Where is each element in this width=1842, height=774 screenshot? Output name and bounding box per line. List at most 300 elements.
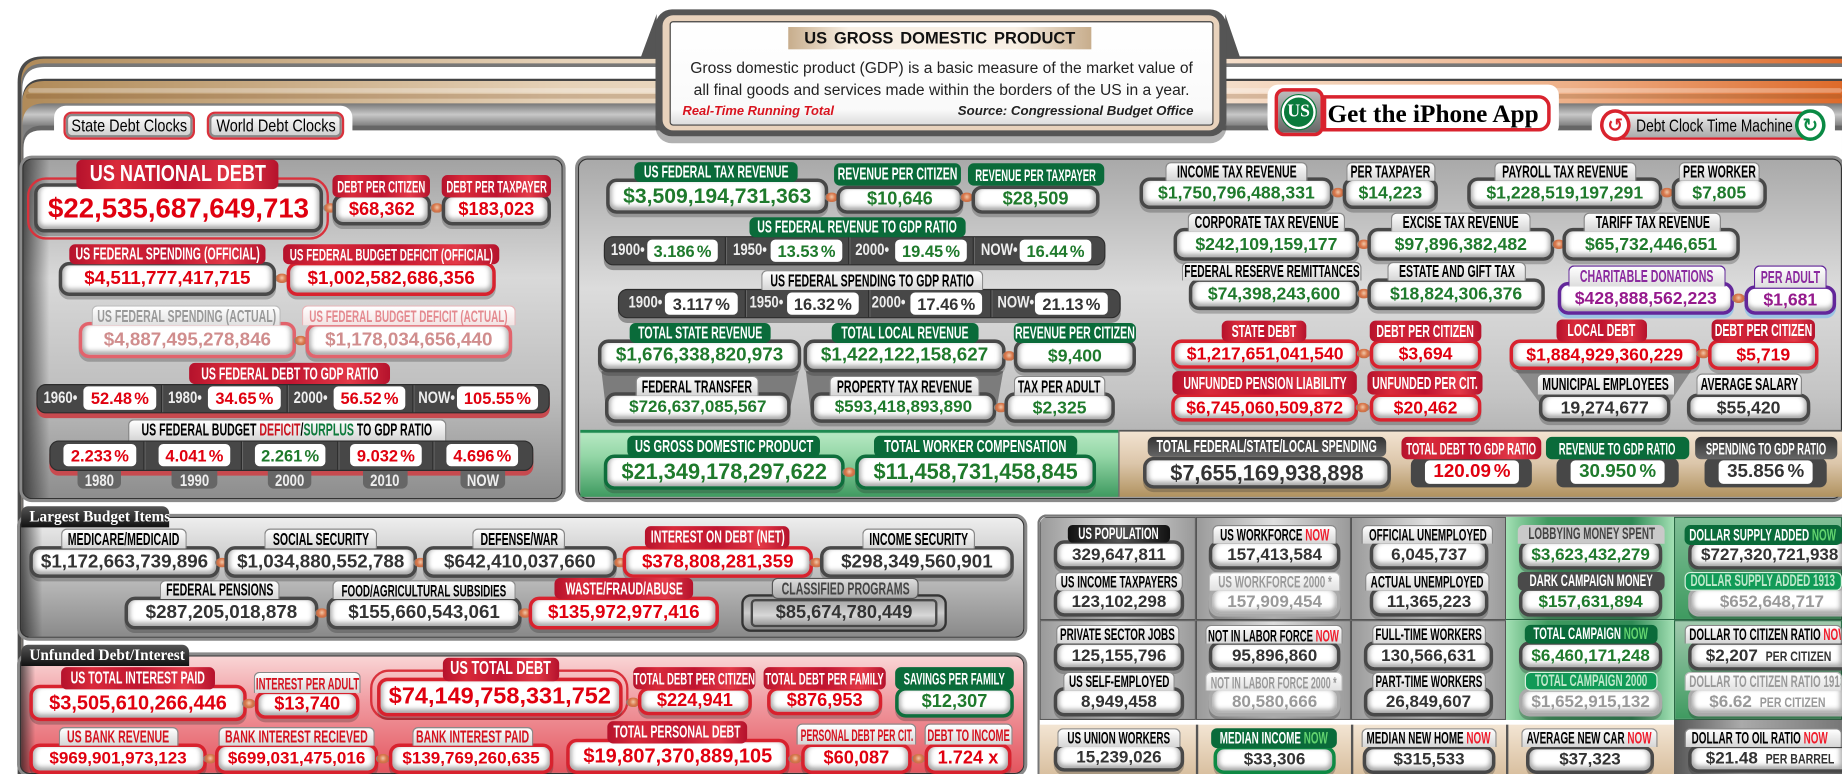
metric: US national debt: $22,535,687,649,713 bbox=[48, 192, 309, 223]
metric: US total interest paid bbox=[29, 667, 247, 721]
icon: back arrow bbox=[1600, 109, 1631, 141]
metric: tax per adult: TAX PER ADULT bbox=[1018, 376, 1101, 396]
metric: US total debt: US TOTAL DEBT bbox=[451, 659, 551, 679]
metric: social security: SOCIAL SECURITY bbox=[273, 529, 369, 548]
grid cell backgrounds bbox=[1040, 517, 1842, 774]
chart: federal spending to GDP ratio: 21.13 % bbox=[1042, 294, 1100, 313]
metric: social security bbox=[224, 529, 417, 578]
metric: local revenue per citizen bbox=[1014, 323, 1136, 376]
metric: US union workers bbox=[1054, 728, 1184, 772]
metric: federal budget deficit actual bbox=[302, 306, 516, 362]
metric: dollar supply added 1913: DOLLAR SUPPLY ADDED 1913 bbox=[1690, 572, 1835, 591]
tab: unfunded debt/interest: Unfunded Debt/Interest bbox=[29, 646, 185, 664]
chart: federal spending to GDP ratio: 3.117 % bbox=[673, 294, 730, 313]
metric: savings per family: SAVINGS PER FAMILY bbox=[904, 669, 1005, 688]
metric: US workforce 2000 bbox=[1209, 572, 1340, 617]
metric: lobbying money spent: $3,623,432,279 bbox=[1531, 546, 1650, 564]
metric: federal pensions: $287,205,018,878 bbox=[146, 603, 297, 622]
metric: municipal employees bbox=[1538, 374, 1674, 426]
chart: budget deficit/surplus to GDP ratio: 9.032 % bbox=[357, 446, 415, 465]
metric: federal transfer: FEDERAL TRANSFER bbox=[642, 376, 752, 396]
metric: unfunded per citizen: $20,462 bbox=[1394, 398, 1457, 418]
metric: US income taxpayers bbox=[1054, 572, 1184, 617]
metric: US gross domestic product: $21,349,178,297,622 bbox=[621, 459, 827, 484]
metric: payroll tax revenue bbox=[1467, 162, 1662, 213]
metric: total worker compensation bbox=[855, 436, 1096, 490]
metric: personal debt per citizen: $60,087 bbox=[823, 748, 889, 768]
metric: US gross domestic product bbox=[604, 436, 845, 490]
tab: largest budget items: Largest Budget Items bbox=[29, 507, 170, 525]
card description bbox=[690, 59, 1193, 99]
metric: charitable per adult: $1,681 bbox=[1763, 290, 1817, 310]
metric: defense/war bbox=[423, 529, 617, 578]
chart: federal debt to GDP ratio: 2000• bbox=[294, 388, 328, 406]
metric: part-time workers bbox=[1364, 672, 1493, 716]
icon: US badge: US bbox=[1287, 102, 1310, 121]
metric: total personal debt: $19,807,370,889,105 bbox=[583, 745, 772, 767]
chart: budget deficit/surplus to GDP ratio: 2000 bbox=[275, 470, 304, 489]
metric: federal transfer bbox=[605, 376, 791, 426]
metric: tax per adult: $2,325 bbox=[1033, 398, 1087, 418]
chart: federal spending to GDP ratio: 16.32 % bbox=[794, 294, 852, 313]
button: state debt clocks: State Debt Clocks bbox=[71, 116, 187, 136]
metric: unfunded pension liability: UNFUNDED PENSION LIABILITY bbox=[1183, 373, 1346, 393]
metric: waste/fraud/abuse: WASTE/FRAUD/ABUSE bbox=[565, 578, 683, 598]
chart: budget deficit/surplus to GDP ratio: US FEDERAL BUDGET DEFICIT/SURPLUS TO GDP RATIO bbox=[142, 420, 433, 440]
chart: budget deficit/surplus to GDP ratio: 2.233 % bbox=[71, 446, 129, 465]
metric: total campaign 2000 bbox=[1519, 672, 1663, 716]
metric: classified programs: $85,674,780,449 bbox=[776, 603, 912, 622]
metric: food/agricultural subsidies bbox=[327, 580, 522, 630]
metric: local debt: $1,884,929,360,229 bbox=[1526, 345, 1683, 365]
chart: federal revenue to GDP ratio: NOW• bbox=[981, 240, 1018, 258]
icon: US badge bbox=[1275, 88, 1324, 136]
metric: federal budget deficit official: $1,002,582,686,356 bbox=[308, 268, 475, 288]
metric: total debt per citizen bbox=[633, 667, 755, 715]
metric: US population bbox=[1054, 525, 1184, 570]
metric: estate and gift tax: $18,824,306,376 bbox=[1390, 284, 1522, 304]
chart: federal revenue to GDP ratio: 1950• bbox=[733, 240, 767, 258]
metric: defense/war: DEFENSE/WAR bbox=[480, 529, 557, 548]
metric: dollar supply added 1913 bbox=[1685, 572, 1842, 617]
metric: state debt per citizen: $3,694 bbox=[1399, 344, 1452, 364]
metric: income security bbox=[820, 529, 1014, 578]
metric: social security: $1,034,880,552,788 bbox=[237, 551, 404, 571]
chart: federal spending to GDP ratio: NOW• bbox=[997, 292, 1034, 311]
icon: back arrow: ↺ bbox=[1607, 114, 1623, 136]
button: get the iPhone app bbox=[1268, 85, 1559, 136]
metric: corporate tax revenue: $242,109,159,177 bbox=[1195, 234, 1337, 254]
metric: personal debt per citizen bbox=[796, 723, 916, 774]
metric: waste/fraud/abuse bbox=[529, 578, 719, 630]
metric: private sector jobs bbox=[1054, 625, 1184, 671]
metric: classified programs bbox=[741, 578, 947, 632]
metric: savings per family bbox=[895, 667, 1014, 718]
metric: revenue per citizen: $10,646 bbox=[867, 189, 933, 209]
chart: budget deficit/surplus to GDP ratio: 2.261 % bbox=[261, 446, 319, 465]
metric: official unemployed bbox=[1362, 525, 1493, 570]
metric: state debt bbox=[1171, 320, 1360, 372]
metric: interest on debt: $378,808,281,359 bbox=[642, 551, 794, 571]
chart: federal debt to GDP ratio: 34.65 % bbox=[215, 389, 273, 408]
metric: total worker compensation: TOTAL WORKER COMPENSATION bbox=[884, 436, 1067, 456]
metric: dollar to citizen ratio 1913: PER CITIZEN bbox=[1760, 694, 1826, 710]
metric: medicare/medicaid: $1,172,663,739,896 bbox=[41, 551, 208, 571]
metric: official unemployed: 6,045,737 bbox=[1391, 546, 1467, 564]
metric: medicare/medicaid: MEDICARE/MEDICAID bbox=[68, 529, 180, 548]
metric: bank interest paid: $139,769,260,635 bbox=[402, 749, 540, 768]
metric: spending to GDP ratio: 35.856 % bbox=[1727, 462, 1804, 482]
metric: estate and gift tax bbox=[1367, 262, 1545, 314]
metric: total federal/state/local spending: TOTAL FEDERAL/STATE/LOCAL SPENDING bbox=[1157, 437, 1377, 457]
metric: interest per adult: $13,740 bbox=[274, 694, 340, 714]
chart: federal revenue to GDP ratio: 13.53 % bbox=[777, 241, 835, 260]
button: world debt clocks: World Debt Clocks bbox=[216, 116, 335, 136]
chart: federal debt to GDP ratio bbox=[36, 362, 550, 418]
metric: charitable donations: CHARITABLE DONATIONS bbox=[1580, 267, 1714, 287]
metric: total debt per family bbox=[764, 667, 886, 715]
metric: full-time workers bbox=[1364, 625, 1493, 671]
chart: federal revenue to GDP ratio: 3.186 % bbox=[654, 241, 712, 260]
metric: not in labor force now: 95,896,860 bbox=[1232, 647, 1317, 665]
chart: federal debt to GDP ratio: 56.52 % bbox=[340, 389, 398, 408]
metric: local revenue per citizen: $9,400 bbox=[1048, 346, 1102, 366]
metric: corporate tax revenue bbox=[1174, 212, 1360, 264]
metric: not in labor force 2000 bbox=[1205, 672, 1343, 716]
chart: federal spending to GDP ratio: US FEDERAL SPENDING TO GDP RATIO bbox=[770, 271, 974, 290]
metric: interest per adult bbox=[254, 672, 361, 719]
metric: interest per adult: INTEREST PER ADULT bbox=[256, 674, 359, 692]
metric: US total debt bbox=[370, 658, 628, 720]
metric: not in labor force 2000: 80,580,666 bbox=[1232, 692, 1317, 711]
metric: bank interest received bbox=[215, 727, 378, 774]
chart: federal debt to GDP ratio: NOW• bbox=[418, 388, 455, 406]
metric: average new car now: $37,323 bbox=[1559, 751, 1621, 769]
metric: median income now: $33,306 bbox=[1244, 751, 1305, 769]
metric: bank interest paid bbox=[389, 727, 553, 774]
metric: spending to GDP ratio bbox=[1695, 437, 1837, 487]
metric: US income taxpayers: 123,102,298 bbox=[1072, 593, 1166, 611]
metric: waste/fraud/abuse: $135,972,977,416 bbox=[548, 603, 700, 622]
band: tan spending bbox=[1118, 430, 1842, 497]
nav buttons: state and world debt clocks bbox=[54, 106, 352, 142]
metric: revenue per taxpayer bbox=[968, 163, 1104, 218]
metric: US bank revenue bbox=[29, 727, 207, 774]
chart: federal debt to GDP ratio: 1980• bbox=[168, 388, 202, 406]
metric: interest on debt: INTEREST ON DEBT (NET) bbox=[650, 527, 784, 547]
metric: charitable per adult bbox=[1744, 266, 1836, 318]
metric: tariff tax revenue bbox=[1562, 212, 1740, 264]
icon: forward arrow: ↻ bbox=[1802, 114, 1818, 136]
metric: actual unemployed: 11,365,223 bbox=[1387, 593, 1471, 611]
button: debt clock time machine: Debt Clock Time Machine bbox=[1636, 116, 1792, 136]
metric: total local revenue bbox=[804, 323, 1006, 376]
card heading: US GROSS DOMESTIC PRODUCT bbox=[804, 28, 1075, 47]
metric: debt per taxpayer: DEBT PER TAXPAYER bbox=[446, 177, 547, 196]
metric: federal tax revenue: $3,509,194,731,363 bbox=[623, 184, 811, 207]
metric: US self-employed: 8,949,458 bbox=[1081, 692, 1157, 711]
metric: federal budget deficit official: US FEDERAL BUDGET DEFICIT (OFFICIAL) bbox=[290, 245, 493, 264]
metric: revenue per citizen: REVENUE PER CITIZEN bbox=[838, 164, 957, 184]
metric: state debt: $1,217,651,041,540 bbox=[1187, 344, 1344, 364]
metric: dollar to oil ratio now bbox=[1685, 728, 1842, 773]
metric: median income now bbox=[1211, 728, 1337, 774]
metric: total debt per family: TOTAL DEBT PER FAMILY bbox=[765, 669, 884, 688]
metric: average salary: AVERAGE SALARY bbox=[1700, 375, 1798, 395]
metric: local debt per citizen: $5,719 bbox=[1736, 345, 1790, 365]
chart: federal debt to GDP ratio: 1960• bbox=[43, 388, 77, 406]
metric: revenue to GDP ratio: REVENUE TO GDP RATIO bbox=[1559, 439, 1676, 457]
metric: income tax per taxpayer: $14,223 bbox=[1358, 183, 1422, 203]
metric: charitable donations: $428,888,562,223 bbox=[1575, 288, 1717, 308]
metric: dollar to citizen ratio now: PER CITIZEN bbox=[1766, 648, 1832, 664]
metric: dollar to oil ratio now: PER BARREL bbox=[1766, 751, 1835, 767]
metric: interest on debt bbox=[623, 526, 813, 578]
metric: total debt per citizen: TOTAL DEBT PER CITIZEN bbox=[634, 669, 755, 688]
metric: local debt: LOCAL DEBT bbox=[1568, 321, 1636, 341]
metric: property tax revenue: $593,418,893,890 bbox=[835, 398, 972, 417]
metric: dollar supply added 1913: $652,648,717 bbox=[1720, 593, 1824, 611]
metric: dollar supply added now bbox=[1685, 525, 1842, 570]
metric: income security: $298,349,560,901 bbox=[841, 551, 993, 571]
metric: dollar to citizen ratio 1913: $6.62 bbox=[1709, 692, 1752, 711]
metric: total state revenue: $1,676,338,820,973 bbox=[616, 345, 783, 365]
chart: budget deficit/surplus to GDP ratio: 4.041 % bbox=[165, 446, 223, 465]
metric: dollar to oil ratio now: $21.48 bbox=[1706, 749, 1758, 768]
metric: total debt to GDP ratio bbox=[1401, 437, 1541, 487]
metric: total debt per citizen: $224,941 bbox=[657, 691, 733, 711]
chart: federal revenue to GDP ratio: 19.45 % bbox=[902, 241, 960, 260]
metric: US total debt: $74,149,758,331,752 bbox=[389, 684, 611, 709]
metric: average salary: $55,420 bbox=[1717, 398, 1780, 418]
metric: total debt to GDP ratio: 120.09 % bbox=[1433, 462, 1510, 482]
metric: savings per family: $12,307 bbox=[922, 692, 987, 712]
metric: revenue per taxpayer: REVENUE PER TAXPAYER bbox=[976, 165, 1096, 184]
metric: total campaign now bbox=[1519, 625, 1663, 671]
metric: income tax revenue: $1,750,796,488,331 bbox=[1158, 183, 1315, 203]
metric: debt per taxpayer: $183,023 bbox=[458, 199, 534, 219]
chart: budget deficit/surplus to GDP ratio: 1980 bbox=[85, 470, 114, 489]
metric: state debt per citizen bbox=[1370, 320, 1482, 372]
panel: national debt bbox=[22, 159, 563, 499]
chart: federal debt to GDP ratio: 52.48 % bbox=[91, 389, 149, 408]
metric: payroll tax per worker: $7,805 bbox=[1692, 183, 1746, 203]
card description: Gross domestic product (GDP) is a basic measure of the market value of bbox=[690, 59, 1193, 76]
metric: federal budget deficit official bbox=[283, 244, 500, 300]
metric: total campaign 2000: TOTAL CAMPAIGN 2000 bbox=[1535, 672, 1647, 691]
metric: excise tax revenue: $97,896,382,482 bbox=[1395, 234, 1527, 254]
metric: revenue per citizen bbox=[834, 163, 964, 218]
metric: US total interest paid: $3,505,610,266,446 bbox=[49, 691, 227, 714]
card description: all final goods and services made within the borders of the US in a year. bbox=[694, 81, 1189, 99]
metric: lobbying money spent: LOBBYING MONEY SPENT bbox=[1528, 525, 1654, 544]
chart: federal revenue to GDP ratio: 2000• bbox=[855, 240, 889, 258]
metric: not in labor force now bbox=[1205, 625, 1343, 671]
metric: median income now: MEDIAN INCOME NOW bbox=[1220, 729, 1328, 748]
metric: total campaign now: $6,460,171,248 bbox=[1531, 647, 1650, 665]
metric: US union workers: 15,239,026 bbox=[1076, 748, 1162, 767]
metric: federal reserve remittances bbox=[1182, 262, 1362, 314]
metric: state debt per citizen: DEBT PER CITIZEN bbox=[1377, 321, 1474, 341]
metric: federal spending official: US FEDERAL SPENDING (OFFICIAL) bbox=[75, 244, 260, 264]
icon: forward arrow bbox=[1795, 109, 1826, 141]
metric: local debt per citizen bbox=[1708, 320, 1818, 374]
metric: federal tax revenue bbox=[606, 162, 828, 218]
metric: dollar supply added now: DOLLAR SUPPLY ADDED NOW bbox=[1689, 526, 1836, 544]
metric: tariff tax revenue: $65,732,446,651 bbox=[1585, 234, 1717, 254]
metric: federal spending official: $4,511,777,417,715 bbox=[84, 268, 250, 288]
chart: federal spending to GDP ratio: 1900• bbox=[628, 292, 662, 311]
metric: total debt to GDP ratio: TOTAL DEBT TO GDP RATIO bbox=[1406, 439, 1536, 457]
metric: federal reserve remittances: $74,398,243,600 bbox=[1208, 284, 1340, 304]
metric: total personal debt bbox=[566, 721, 789, 774]
metric: average salary bbox=[1686, 374, 1810, 426]
metric: income tax revenue bbox=[1140, 162, 1334, 213]
metric: spending to GDP ratio: SPENDING TO GDP RATIO bbox=[1706, 439, 1826, 457]
chart: federal spending to GDP ratio: 2000• bbox=[872, 292, 906, 311]
metric: municipal employees: 19,274,677 bbox=[1561, 398, 1649, 418]
chart: federal revenue to GDP ratio: US FEDERAL REVENUE TO GDP RATIO bbox=[758, 217, 957, 237]
chart: budget deficit/surplus to GDP ratio bbox=[49, 420, 534, 489]
running total note: Real-Time Running Total bbox=[683, 105, 834, 119]
metric: defense/war: $642,410,037,660 bbox=[444, 551, 596, 571]
metric: debt to income: 1.724 x bbox=[938, 748, 998, 768]
metric: private sector jobs: 125,155,796 bbox=[1072, 647, 1166, 665]
chart: federal spending to GDP ratio: 17.46 % bbox=[917, 294, 975, 313]
metric: food/agricultural subsidies: $155,660,543,061 bbox=[348, 603, 500, 622]
metric: dollar to citizen ratio now bbox=[1685, 625, 1842, 671]
chart: budget deficit/surplus to GDP ratio: 4.696 % bbox=[453, 446, 511, 465]
chart: budget deficit/surplus to GDP ratio: 1990 bbox=[180, 470, 209, 489]
metric: lobbying money spent bbox=[1518, 525, 1665, 570]
metric: unfunded per citizen: UNFUNDED PER CIT. bbox=[1372, 373, 1478, 393]
chart: budget deficit/surplus to GDP ratio: 2010 bbox=[371, 470, 400, 489]
metric: payroll tax per worker bbox=[1672, 162, 1767, 213]
metric: US national debt bbox=[27, 160, 329, 240]
panel: unfunded debt/interest bbox=[20, 655, 1024, 774]
metric: local debt bbox=[1510, 320, 1700, 374]
chart: federal revenue to GDP ratio: 16.44 % bbox=[1027, 241, 1085, 260]
panel: revenue bbox=[578, 159, 1842, 499]
metric: dark campaign money: $157,631,894 bbox=[1538, 593, 1643, 611]
metric: debt per citizen bbox=[332, 175, 432, 229]
metric: total campaign now: TOTAL CAMPAIGN NOW bbox=[1534, 625, 1648, 644]
metric: bank interest received: $699,031,475,016 bbox=[228, 749, 365, 768]
metric: unfunded per citizen bbox=[1367, 371, 1482, 426]
metric: total state revenue bbox=[598, 323, 802, 376]
metric: classified programs: CLASSIFIED PROGRAMS bbox=[781, 578, 909, 598]
metric: total debt per family: $876,953 bbox=[787, 691, 863, 711]
metric: property tax revenue bbox=[810, 376, 996, 426]
metric: personal debt per citizen: PERSONAL DEBT PER CIT. bbox=[800, 725, 913, 744]
metric: US national debt: US NATIONAL DEBT bbox=[89, 161, 266, 187]
metric: median new home now: $315,533 bbox=[1394, 751, 1465, 769]
metric: local debt per citizen: DEBT PER CITIZEN bbox=[1715, 321, 1812, 341]
metric: actual unemployed bbox=[1365, 572, 1490, 617]
metric: total worker compensation: $11,458,731,458,845 bbox=[873, 459, 1078, 484]
metric: local revenue per citizen: REVENUE PER CITIZEN bbox=[1015, 323, 1135, 343]
metric: federal pensions bbox=[125, 580, 318, 630]
panel: workforce and money grid bbox=[1037, 514, 1842, 774]
metric: debt per citizen: $68,362 bbox=[349, 199, 415, 219]
band: green GDP bbox=[580, 430, 1118, 497]
metric: US total interest paid: US TOTAL INTEREST PAID bbox=[71, 668, 205, 688]
metric: total state revenue: TOTAL STATE REVENUE bbox=[638, 323, 762, 343]
chart: federal spending to GDP ratio: 1950• bbox=[749, 292, 783, 311]
metric: dark campaign money bbox=[1518, 572, 1665, 617]
metric: US bank revenue: $969,901,973,123 bbox=[49, 749, 187, 768]
metric: unfunded pension liability: $6,745,060,509,872 bbox=[1186, 398, 1343, 418]
metric: federal transfer: $726,637,085,567 bbox=[629, 398, 766, 417]
metric: debt to income: DEBT TO INCOME bbox=[927, 725, 1010, 744]
button: get the iPhone app: Get the iPhone App bbox=[1327, 100, 1539, 128]
metric: income tax per taxpayer bbox=[1342, 162, 1438, 213]
metric: unfunded pension liability bbox=[1171, 371, 1358, 426]
metric: dark campaign money: DARK CAMPAIGN MONEY bbox=[1530, 572, 1653, 591]
metric: total local revenue: $1,422,122,158,627 bbox=[821, 345, 988, 365]
metric: median new home now bbox=[1362, 728, 1497, 774]
metric: federal spending actual: US FEDERAL SPENDING (ACTUAL) bbox=[97, 306, 276, 325]
metric: average new car now bbox=[1521, 728, 1658, 774]
metric: US workforce 2000: 157,909,454 bbox=[1227, 593, 1322, 611]
metric: revenue to GDP ratio: 30.950 % bbox=[1579, 462, 1656, 482]
source note: Source: Congressional Budget Office bbox=[958, 105, 1194, 119]
button: debt clock time machine bbox=[1592, 106, 1835, 146]
metric: full-time workers: 130,566,631 bbox=[1381, 647, 1476, 665]
metric: total federal/state/local spending: $7,655,169,938,898 bbox=[1170, 460, 1364, 484]
chart: budget deficit/surplus to GDP ratio: NOW bbox=[467, 470, 499, 489]
metric: charitable per adult: PER ADULT bbox=[1761, 267, 1820, 287]
metric: US workforce now: 157,413,584 bbox=[1227, 546, 1322, 564]
panel: largest budget items bbox=[20, 517, 1024, 638]
metric: total local revenue: TOTAL LOCAL REVENUE bbox=[842, 323, 969, 343]
metric: tax per adult bbox=[1004, 376, 1115, 426]
chart: federal debt to GDP ratio: 105.55 % bbox=[464, 389, 531, 408]
metric: medicare/medicaid bbox=[29, 529, 220, 578]
metric: debt per citizen: DEBT PER CITIZEN bbox=[337, 177, 425, 196]
chart: federal spending to GDP ratio bbox=[618, 270, 1121, 323]
metric: charitable donations bbox=[1558, 266, 1734, 318]
metric: US gross domestic product: US GROSS DOMESTIC PRODUCT bbox=[635, 436, 813, 456]
button: state debt clocks bbox=[63, 112, 195, 140]
metric: federal spending official bbox=[58, 244, 276, 300]
metric: US workforce now bbox=[1209, 525, 1340, 570]
metric: total federal/state/local spending bbox=[1143, 437, 1391, 489]
metric: total campaign 2000: $1,652,915,132 bbox=[1531, 693, 1650, 712]
chart: federal revenue to GDP ratio bbox=[604, 217, 1106, 270]
metric: federal spending actual bbox=[78, 306, 296, 362]
metric: excise tax revenue bbox=[1367, 212, 1554, 264]
metric: federal tax revenue: US FEDERAL TAX REVENUE bbox=[644, 162, 788, 182]
metric: US population: 329,647,811 bbox=[1072, 546, 1166, 564]
metric: dollar supply added now: $727,320,721,938 bbox=[1701, 546, 1838, 564]
metric: US self-employed bbox=[1054, 672, 1184, 716]
chart: federal revenue to GDP ratio: 1900• bbox=[611, 240, 645, 258]
metric: payroll tax revenue: $1,228,519,197,291 bbox=[1486, 183, 1643, 203]
metric: total personal debt: TOTAL PERSONAL DEBT bbox=[614, 722, 741, 742]
metric: revenue to GDP ratio bbox=[1546, 437, 1689, 487]
metric: state debt: STATE DEBT bbox=[1232, 321, 1296, 341]
metric: municipal employees: MUNICIPAL EMPLOYEES bbox=[1543, 375, 1669, 395]
metric: federal budget deficit actual: $1,178,034,656,440 bbox=[325, 330, 492, 350]
chart: federal debt to GDP ratio: US FEDERAL DEBT TO GDP RATIO bbox=[201, 364, 378, 383]
metric: revenue per taxpayer: $28,509 bbox=[1003, 189, 1068, 209]
metric: federal spending actual: $4,887,495,278,846 bbox=[104, 329, 271, 349]
metric: federal budget deficit actual: US FEDERAL BUDGET DEFICIT (ACTUAL) bbox=[310, 307, 508, 325]
metric: dollar to citizen ratio 1913 bbox=[1685, 672, 1842, 716]
metric: dollar to citizen ratio now: $2,207 bbox=[1706, 647, 1758, 665]
GDP title card bbox=[656, 9, 1226, 136]
